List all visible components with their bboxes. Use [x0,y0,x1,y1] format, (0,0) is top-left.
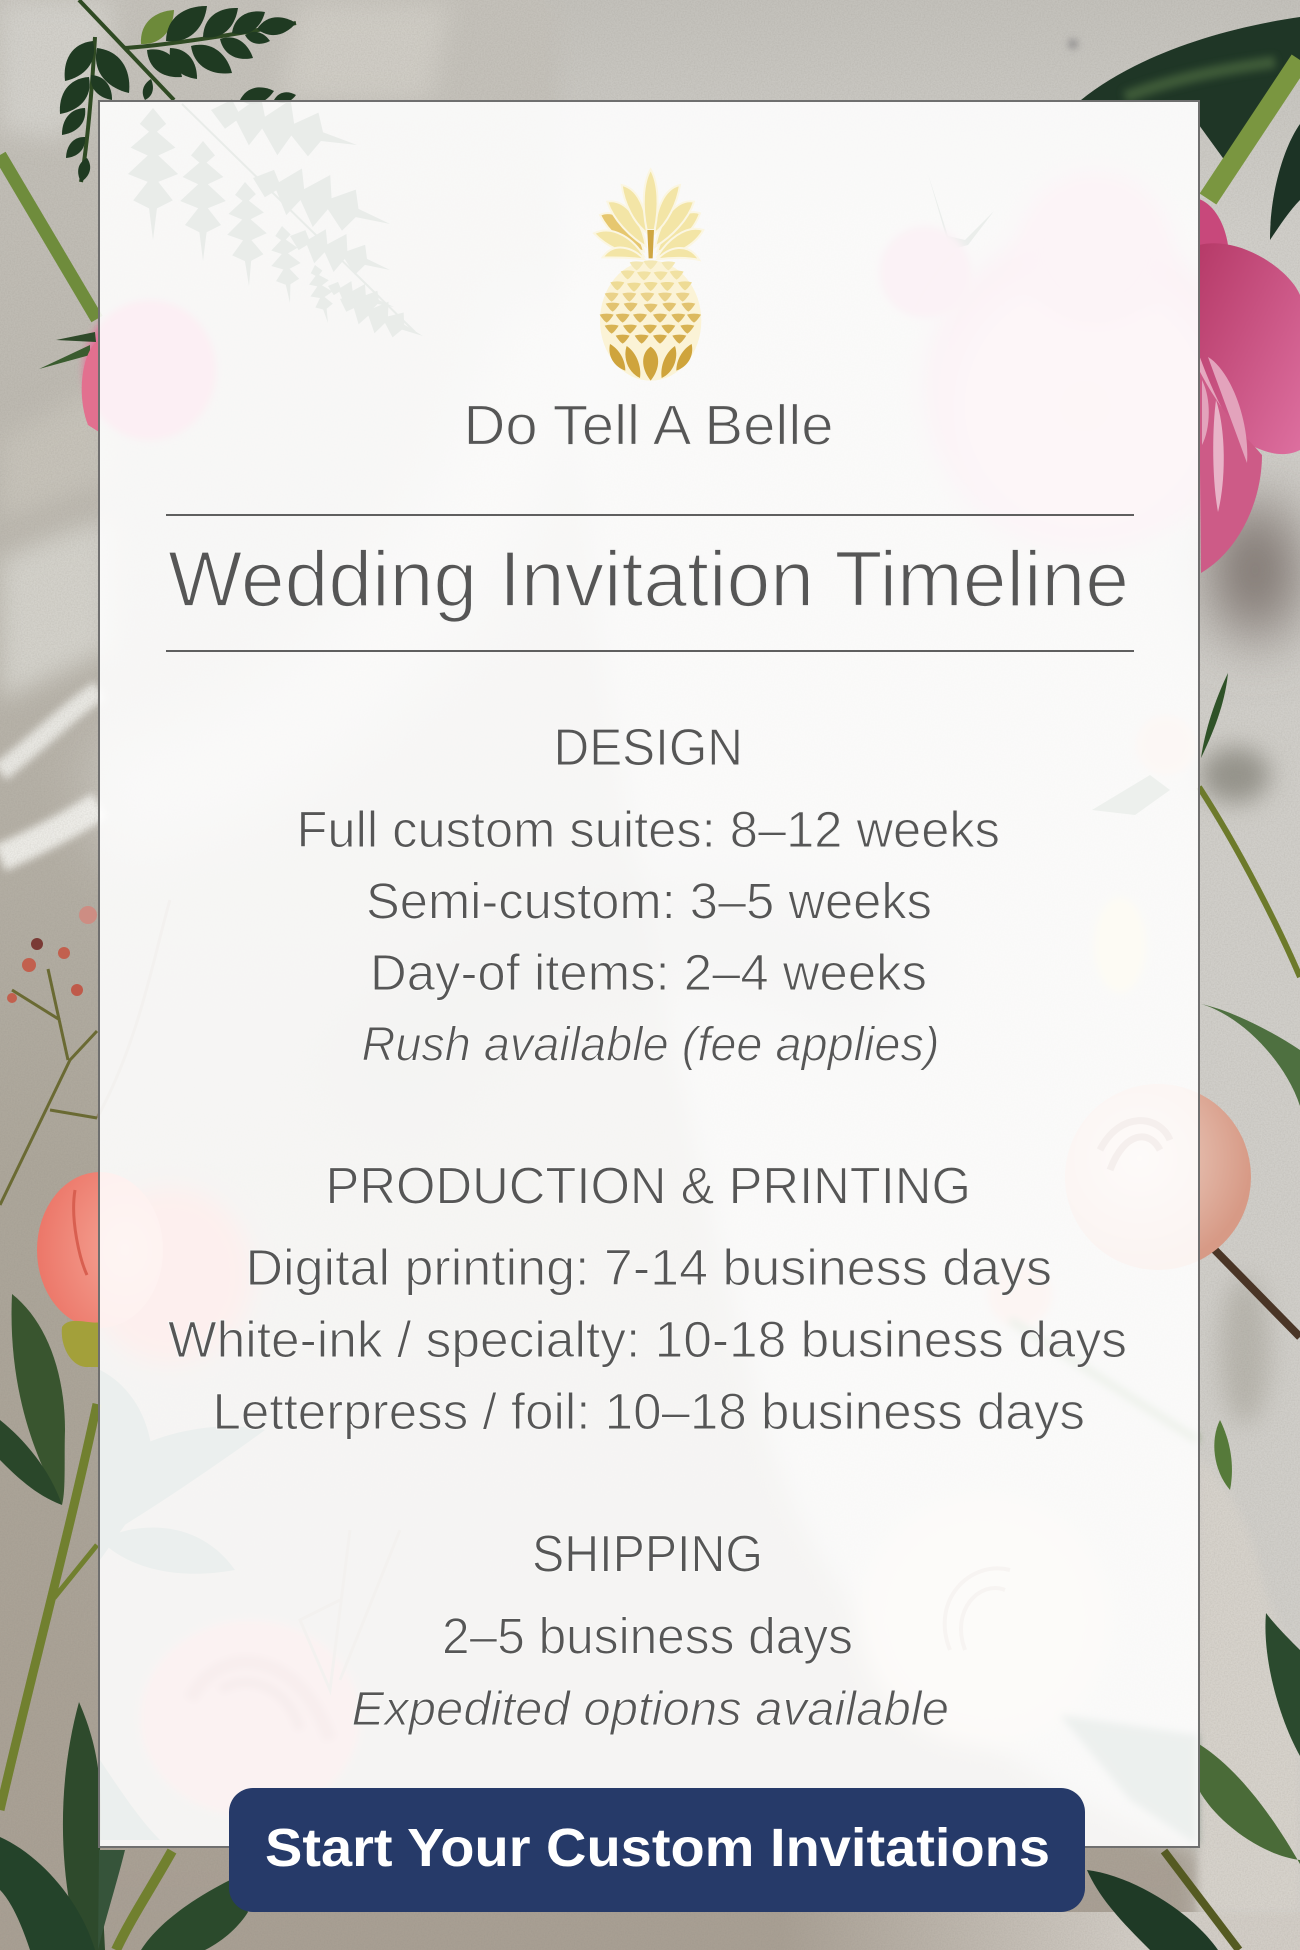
heading: shipping: SHIPPING [532,1526,763,1584]
icon: gold pineapple logo [594,169,703,381]
ghost florals showing through card [84,82,1197,1845]
flower: magenta peony [925,172,1300,573]
section: shipping: Expedited options available [352,1683,949,1736]
section: design [296,719,1000,1072]
pineapple base petals [609,344,692,381]
pineapple crown [594,169,703,260]
plant: top-right leaves and stem [1081,17,1300,240]
ghost sprigs [97,900,400,1690]
plant: lower-right leaves and stem [1087,1420,1300,1950]
plant: lower-left leaves and stems [0,1294,248,1950]
section: design: Full custom suites: 8–12 weeks [296,801,1000,858]
section: design: Semi-custom: 3–5 weeks [366,872,932,930]
section: design: Day-of items: 2–4 weeks [370,944,927,1001]
title with rules: Wedding Invitation Timeline [168,534,1129,623]
ghost pink bud [879,174,994,318]
section: design: Rush available (fee applies) [362,1018,940,1072]
ghost left leaves [100,1370,265,1840]
ghost fern [128,82,430,352]
ghost pink rose [140,1620,360,1816]
plant: top-left fern [51,0,298,184]
pineapple scales [600,260,701,344]
plant: red sprigs [0,906,97,1205]
plant: left stem and pink bud [0,155,99,432]
brand name: Do Tell A Belle [464,394,834,458]
section: shipping [352,1526,949,1736]
button: call to action: Start Your Custom Invitations [265,1818,1050,1878]
heading: design: DESIGN [554,719,743,777]
section: production and printing: Letterpress / foil: 10–18 business days [212,1383,1085,1440]
section: shipping: 2–5 business days [442,1608,853,1664]
button: call to action [229,1788,1085,1912]
ghost left ranunculus [84,300,216,440]
ghost right leaves and white rose [860,1147,1197,1845]
panel: translucent card [99,101,1199,1847]
pineapple body silhouette [600,261,701,381]
section: production and printing: White-ink / specialty: 10-18 business days [168,1311,1127,1368]
flower: coral peony [37,1172,163,1328]
ghost right buds [988,715,1197,1440]
title with rules [166,515,1134,651]
heading: production and printing: PRODUCTION & PRINTING [326,1158,971,1216]
section: production and printing: Digital printing: 7-14 business days [246,1239,1052,1296]
section: production and printing [168,1158,1127,1440]
ghost coral peony glow [88,1187,252,1363]
plant: right stem and leaves [1199,673,1300,1337]
flower: peach ranunculus [1065,1084,1251,1270]
